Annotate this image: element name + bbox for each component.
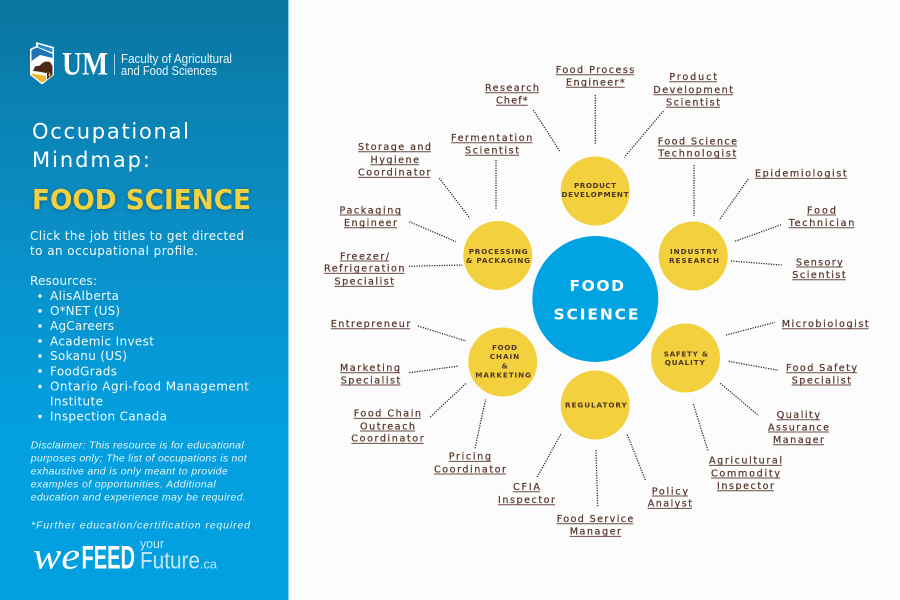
text block: instructions: to an occupational profile.: [30, 244, 198, 258]
label: Sensory Scientist: Sensory: [796, 257, 843, 268]
logo: University of Manitoba: [30, 42, 232, 84]
text block: instructions: [30, 229, 244, 258]
branch: food chain and marketing: &: [502, 361, 508, 370]
text block: resources list: FoodGrads: [50, 364, 117, 378]
text block: disclaimer: examples of opportunities. Additional: [31, 478, 216, 490]
label: Storage and Hygiene Coordinator: Storage and: [358, 142, 431, 153]
branch: safety and quality: SAFETY &: [664, 349, 708, 358]
label: Agricultural Commodity Inspector: Commodity: [711, 468, 780, 479]
label: Marketing Specialist: Marketing: [340, 363, 400, 374]
label: Product Development Scientist: Product: [669, 72, 717, 83]
connector: CFIA inspector: [537, 433, 561, 477]
label: Food Technician: Technician: [788, 218, 854, 229]
connector: product development scientist: [624, 111, 663, 157]
branch: processing and packaging: & PACKAGING: [466, 256, 530, 265]
text block: resources list: O*NET (US): [50, 304, 120, 318]
label: Food Technician: [788, 205, 854, 229]
text block: resources list: Resources:: [30, 274, 97, 288]
label: Fermentation Scientist: Fermentation: [451, 133, 532, 144]
branch: regulatory: REGULATORY: [565, 400, 627, 409]
label: Freezer/Refrigeration Specialist: Freezer/: [340, 251, 390, 262]
heading: Food Science: FOOD SCIENCE: [32, 183, 251, 216]
logo: weFEEDyourFuture.ca: .ca: [200, 556, 218, 572]
label: Freezer/Refrigeration Specialist: Specialist: [334, 277, 394, 288]
branch: product development: DEVELOPMENT: [562, 190, 629, 199]
label: CFIA Inspector: Inspector: [498, 495, 555, 506]
faculty name: and Food Sciences: [121, 64, 217, 78]
branch: industry research: [659, 222, 728, 290]
label: Product Development Scientist: Development: [653, 85, 733, 96]
connector: microbiologist: [726, 322, 775, 335]
logo: weFEEDyourFuture.ca: we: [33, 536, 80, 578]
logo: weFEEDyourFuture.ca: [33, 536, 218, 578]
connector: sensory scientist: [731, 261, 782, 265]
text block: disclaimer: education and experience may be required.: [31, 492, 246, 504]
label: Food Chain Outreach Coordinator: Coordinator: [351, 434, 424, 445]
connector: agricultural commodity inspector: [693, 404, 708, 452]
icon: shield crest: [30, 42, 54, 84]
label: Food Safety Specialist: [786, 363, 857, 386]
label: Food Service Manager: Manager: [570, 527, 621, 538]
label: Food Safety Specialist: Food Safety: [786, 363, 857, 374]
text block: resources list: Sokanu (US): [50, 349, 127, 363]
connector: epidemiologist: [719, 179, 748, 220]
branch: food chain and marketing: CHAIN: [490, 352, 519, 361]
text block: disclaimer: Disclaimer: This resource is for educational: [31, 440, 244, 452]
branch: regulatory: [561, 370, 630, 440]
label: Packaging Engineer: Packaging: [340, 205, 401, 216]
label: Food Service Manager: [557, 514, 633, 538]
logo: weFEEDyourFuture.ca: Future: [140, 548, 200, 574]
branch: safety and quality: [651, 324, 720, 392]
label: Food Chain Outreach Coordinator: [351, 409, 424, 445]
branch: industry research: INDUSTRY: [670, 247, 718, 256]
mindmap: central hub: [532, 236, 658, 362]
label: Product Development Scientist: [653, 72, 733, 108]
label: Food Process Engineer: Engineer*: [566, 78, 625, 88]
branch: food chain and marketing: MARKETING: [475, 370, 531, 379]
text block: disclaimer: purposes only; The list of occupations is not: [30, 452, 248, 464]
connector: storage and hygiene coordinator: [439, 178, 470, 218]
text block: resources list: Academic Invest: [50, 334, 154, 348]
mindmap: central hub: FOOD: [570, 277, 624, 295]
label: Research Chef: Research: [485, 83, 539, 94]
label: Policy Analyst: Analyst: [648, 499, 692, 510]
label: Research Chef: Chef*: [496, 96, 528, 106]
mindmap: central hub: SCIENCE: [554, 306, 638, 324]
label: Microbiologist: Microbiologist: [782, 319, 869, 330]
footnote: *Further education/certification required: [31, 520, 251, 532]
label: Storage and Hygiene Coordinator: Hygiene: [370, 155, 419, 166]
connector: food service manager: [596, 450, 598, 507]
connector: fermentation scientist: [495, 160, 497, 210]
logo: weFEEDyourFuture.ca: your: [140, 536, 165, 551]
label: Food Process Engineer: [556, 65, 634, 88]
label: Quality Assurance Manager: Manager: [773, 435, 824, 446]
label: Agricultural Commodity Inspector: Inspector: [717, 481, 774, 492]
connector: food science technologist: [693, 165, 695, 216]
text block: resources list: Inspection Canada: [50, 410, 167, 424]
text block: disclaimer: exhaustive and is only meant to provide: [31, 466, 228, 478]
connector: marketing specialist: [409, 366, 459, 373]
faculty name: [121, 52, 232, 78]
connector: freezer specialist: [409, 265, 462, 266]
branch: processing and packaging: PROCESSING: [469, 247, 528, 256]
label: Marketing Specialist: Specialist: [341, 375, 401, 386]
label: Entrepreneur: Entrepreneur: [331, 319, 410, 330]
label: Storage and Hygiene Coordinator: [358, 142, 431, 179]
branch: product development: PRODUCT: [574, 181, 616, 190]
label: Pricing Coordinator: Coordinator: [434, 464, 506, 475]
text block: resources list: Ontario Agri-food Management: [50, 380, 249, 394]
branch: processing and packaging: [463, 221, 532, 290]
label: Food Technician: Food: [807, 205, 836, 216]
connector: food chain outreach coordinator: [430, 383, 467, 417]
label: Sensory Scientist: Scientist: [792, 270, 846, 281]
label: CFIA Inspector: [498, 482, 555, 506]
branch: product development: [561, 156, 630, 226]
label: Quality Assurance Manager: Assurance: [768, 422, 829, 433]
label: Food Science Technologist: Food Science: [658, 136, 737, 147]
label: Food Science Technologist: [657, 136, 737, 160]
label: Food Process Engineer: Food Process: [556, 65, 634, 76]
faculty name: Faculty of Agricultural: [121, 52, 232, 66]
label: Policy Analyst: Policy: [652, 486, 688, 497]
label: Fermentation Scientist: [451, 133, 532, 156]
text block: resources list: Institute: [50, 394, 103, 408]
branch: industry research: RESEARCH: [669, 256, 719, 265]
label: Research Chef: [485, 83, 539, 106]
text block: resources list: AgCareers: [50, 319, 114, 333]
label: Agricultural Commodity Inspector: Agricultural: [709, 456, 782, 467]
branch: safety and quality: QUALITY: [665, 358, 705, 367]
label: Freezer/Refrigeration Specialist: Refrigeration: [324, 264, 404, 275]
label: Pricing Coordinator: Pricing: [449, 452, 491, 463]
label: Food Chain Outreach Coordinator: Food Chain: [354, 409, 421, 420]
connector: food safety specialist: [729, 361, 778, 370]
label: Product Development Scientist: Scientist: [666, 98, 720, 108]
text block: resources list: AlisAlberta: [50, 289, 119, 303]
label: Marketing Specialist: [340, 363, 401, 386]
heading: Occupational Mindmap: [32, 120, 189, 172]
connector: entrepreneur: [418, 326, 466, 341]
label: Quality Assurance Manager: [768, 410, 829, 446]
text block: resources list: [30, 274, 249, 424]
text block: disclaimer: [30, 440, 248, 504]
connector: food process engineer: [594, 95, 596, 145]
label: CFIA Inspector: CFIA: [513, 482, 540, 493]
label: Food Safety Specialist: Specialist: [792, 375, 851, 386]
label: Agricultural Commodity Inspector: [709, 456, 782, 492]
branch: food chain and marketing: FOOD: [492, 343, 517, 352]
connector: food technician: [734, 225, 781, 242]
label: Fermentation Scientist: Scientist: [465, 146, 519, 156]
text block: instructions: Click the job titles to get directed: [30, 229, 244, 243]
logo wordmark UM: UM: [62, 46, 108, 82]
label: Packaging Engineer: [340, 205, 401, 229]
label: Packaging Engineer: Engineer: [344, 218, 397, 229]
label: Freezer/Refrigeration Specialist: [324, 251, 404, 288]
label: Storage and Hygiene Coordinator: Coordinator: [358, 168, 431, 179]
label: Food Science Technologist: Technologist: [657, 149, 737, 160]
logo: weFEEDyourFuture.ca: FEED: [82, 540, 135, 576]
connector: policy analyst: [627, 435, 646, 481]
label: Food Chain Outreach Coordinator: Outreach: [360, 421, 415, 432]
label: Epidemiologist: Epidemiologist: [755, 169, 847, 180]
connector: research chef: [533, 110, 560, 152]
branch: food chain and marketing: [468, 328, 537, 396]
connector: pricing coordinator: [475, 399, 486, 448]
heading: Occupational Mindmap: Occupational: [32, 120, 189, 144]
label: Pricing Coordinator: [434, 452, 506, 475]
label: Food Service Manager: Food Service: [557, 514, 633, 525]
label: Sensory Scientist: [792, 257, 846, 281]
label: Policy Analyst: [648, 486, 692, 510]
connector: quality assurance manager: [720, 383, 759, 416]
label: Quality Assurance Manager: Quality: [777, 410, 820, 421]
panel: left sidebar: [0, 0, 289, 600]
heading: Occupational Mindmap: Mindmap:: [32, 148, 150, 172]
connector: packaging engineer: [409, 222, 456, 242]
